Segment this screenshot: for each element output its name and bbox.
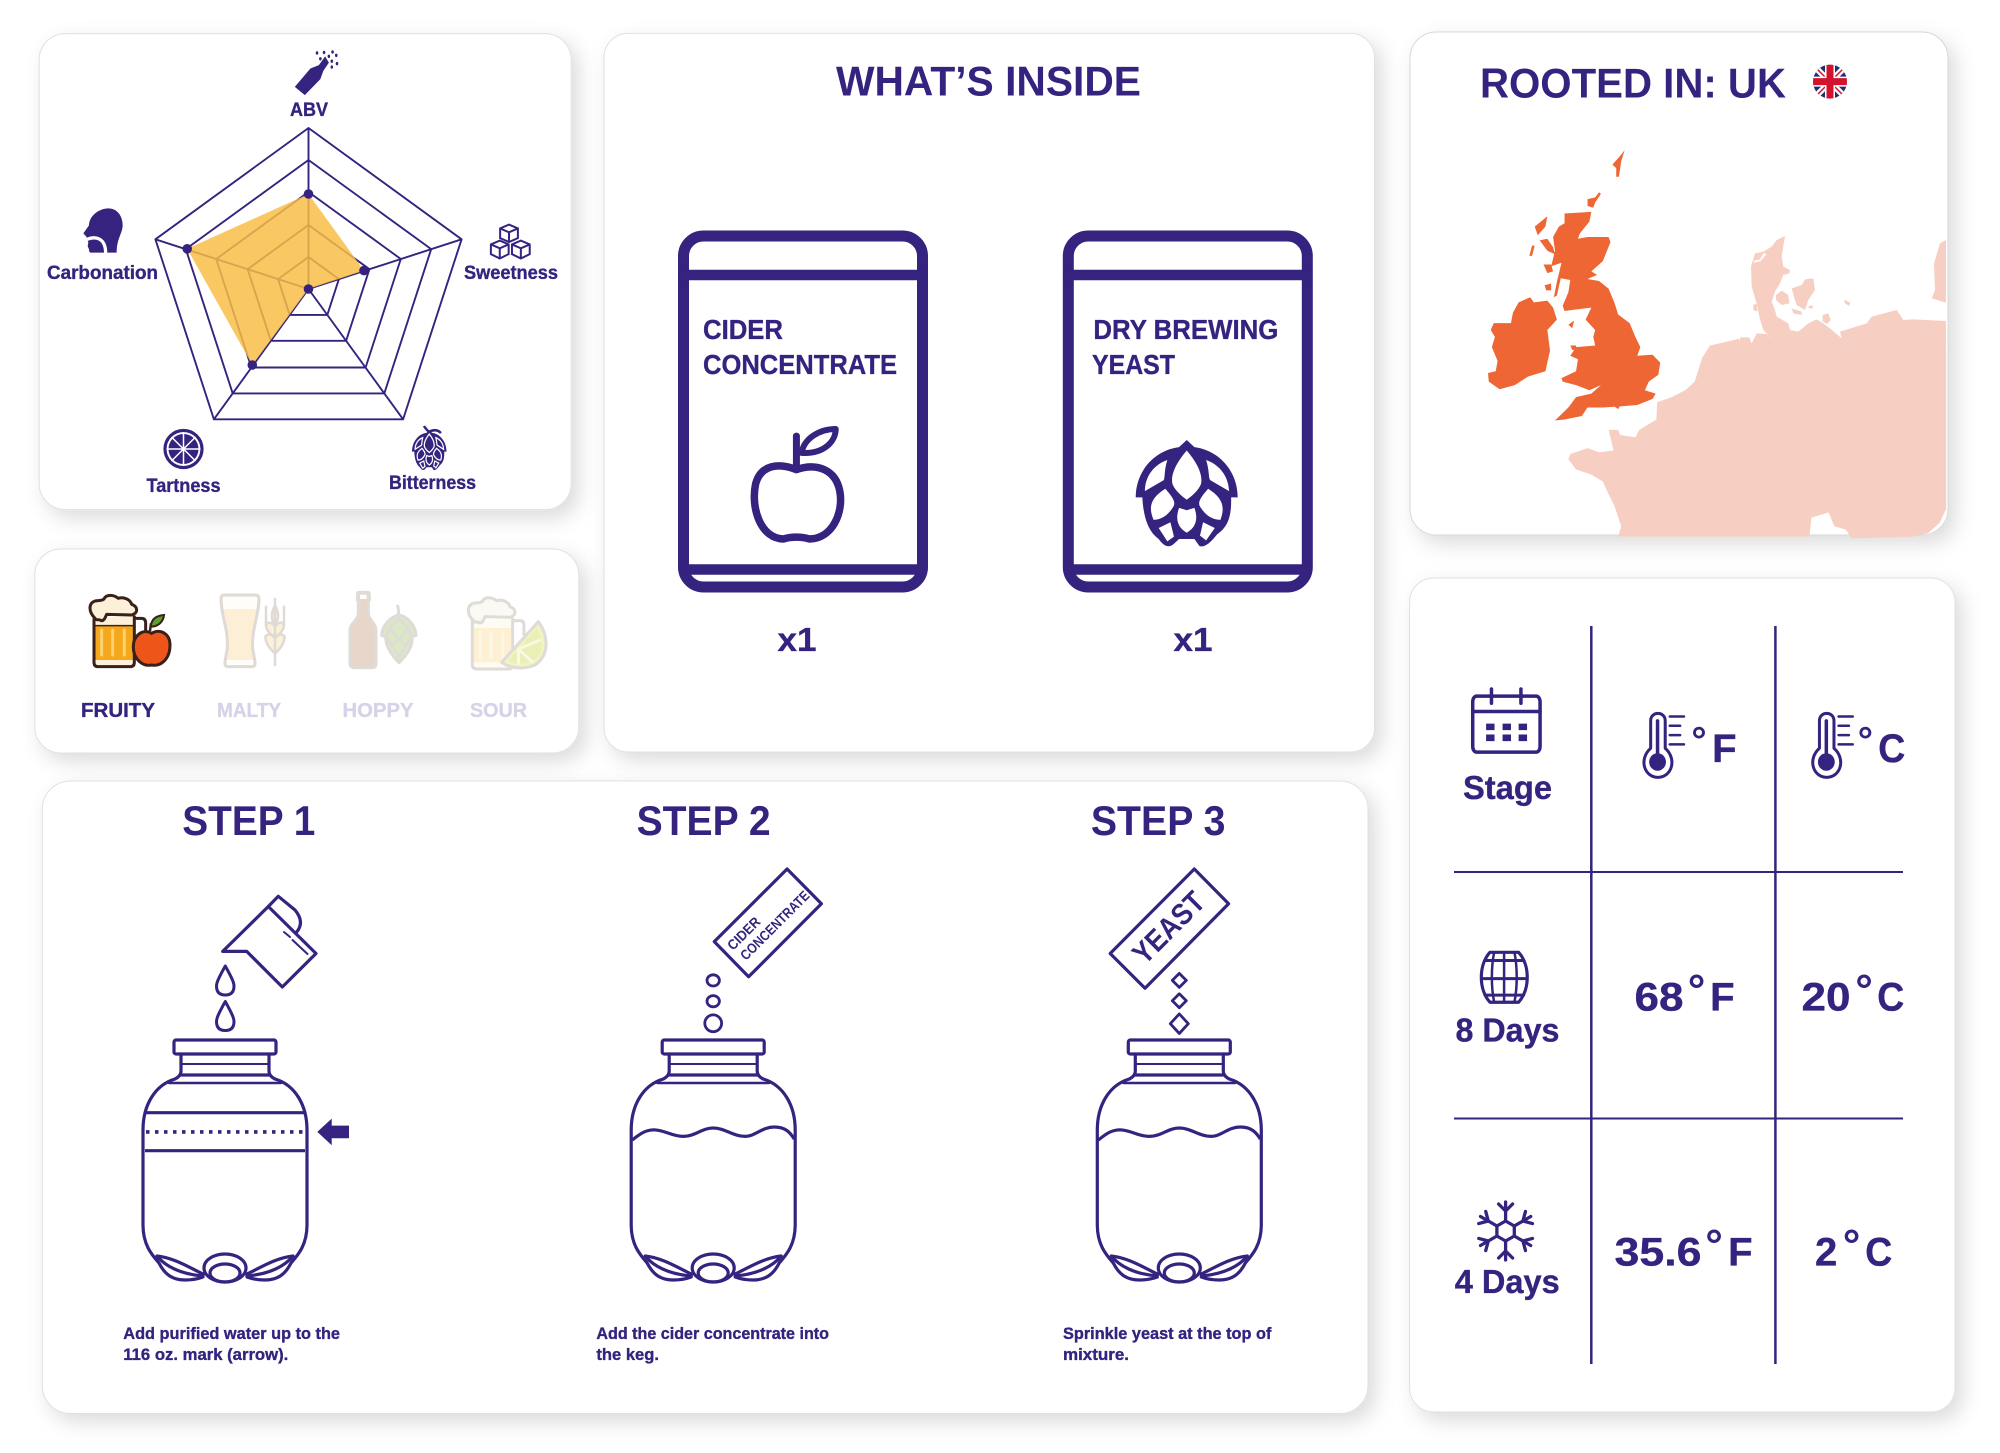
text: step 2 instruction: the keg. <box>596 1346 659 1364</box>
icon: sour mug and lime <box>468 598 546 669</box>
panel: rooted in UK <box>1410 32 1948 538</box>
header: degrees F: ° <box>1691 721 1707 763</box>
label: Bitterness: Bitterness <box>389 473 476 494</box>
icon: head and throat <box>83 208 123 253</box>
label: dry brewing yeast: DRY BREWING <box>1093 314 1278 345</box>
header: degrees C: C <box>1878 727 1905 771</box>
icon: water drops <box>216 966 234 1030</box>
icon: fruity mug and apple <box>90 595 170 667</box>
arrow: fill mark <box>317 1119 349 1145</box>
label: cider concentrate: CIDER <box>703 314 783 345</box>
value: 2 C: ° <box>1843 1221 1860 1270</box>
label: Sweetness: Sweetness <box>464 263 558 284</box>
header: degrees F: F <box>1712 727 1737 771</box>
radar chart <box>155 128 462 419</box>
flavour profile polygon <box>187 194 364 365</box>
text: step 3 instruction: Sprinkle yeast at the top of <box>1063 1325 1272 1343</box>
icon: cider concentrate packet: CIDER <box>724 914 763 953</box>
icon: thermometer F <box>1644 713 1684 777</box>
icon: hop, small <box>412 426 447 470</box>
heading: step 1: STEP 1 <box>182 797 315 844</box>
icon: keg with level mark <box>143 1040 307 1282</box>
pack: cider concentrate <box>684 236 922 587</box>
value: 35.6 F: 35.6 <box>1614 1230 1702 1274</box>
icon: UK flag <box>1812 64 1848 100</box>
panel: flavour radar <box>39 34 571 510</box>
icon: barrel <box>1481 952 1527 1002</box>
icon: measuring jug <box>223 896 316 987</box>
panel: fermentation table <box>1410 578 1955 1412</box>
icon: snowflake <box>1477 1202 1534 1260</box>
value: 68 F: ° <box>1688 966 1705 1015</box>
label: cider concentrate: CONCENTRATE <box>703 349 897 380</box>
icon: keg with mixture <box>1097 1040 1261 1282</box>
icon: malty glass and wheat <box>221 595 285 667</box>
icon: falling yeast <box>1170 973 1188 1034</box>
panel: flavour categories <box>35 549 579 753</box>
value: 35.6 F: ° <box>1705 1221 1723 1270</box>
quantity: yeast: x1 <box>1174 621 1212 658</box>
panel: steps <box>42 781 1368 1414</box>
label: Tartness: Tartness <box>146 476 220 497</box>
step 3 <box>1063 797 1272 1364</box>
heading: what's inside: WHAT’S INSIDE <box>836 58 1141 105</box>
value: 68 F <box>1634 966 1735 1020</box>
data points <box>182 189 369 370</box>
value: 20 C: 20 <box>1802 976 1850 1020</box>
label: ABV: ABV <box>290 100 328 121</box>
text: step 3 instruction <box>1063 1325 1272 1364</box>
text: step 3 instruction: mixture. <box>1063 1346 1129 1364</box>
value: 68 F: 68 <box>1634 976 1684 1020</box>
heading: step 3: STEP 3 <box>1091 797 1225 844</box>
icon: yeast packet: YEAST <box>1126 885 1212 971</box>
icon: yeast packet <box>1110 869 1229 988</box>
value: 2 C <box>1815 1221 1892 1274</box>
icon: citrus slice <box>165 430 202 468</box>
header: degrees F <box>1691 721 1737 771</box>
heading: rooted in UK: ROOTED IN: UK <box>1480 60 1786 106</box>
label: Carbonation: Carbonation <box>47 263 158 284</box>
text: step 1 instruction: Add purified water up to the <box>123 1325 340 1343</box>
value: 35.6 F: F <box>1728 1230 1753 1274</box>
label: 4 Days: 4 Days <box>1455 1263 1560 1300</box>
step 2 <box>596 797 829 1364</box>
text: step 1 instruction: 116 oz. mark (arrow). <box>123 1346 288 1364</box>
label: cider concentrate <box>703 314 897 380</box>
pack: dry brewing yeast <box>1068 236 1307 587</box>
icon: cider concentrate packet: CONCENTRATE <box>737 887 812 963</box>
panel: what's inside <box>604 33 1374 752</box>
step 1 <box>123 797 349 1364</box>
value: 20 C <box>1802 966 1904 1020</box>
label: HOPPY: HOPPY <box>342 700 414 722</box>
icon: calendar <box>1473 689 1540 752</box>
text: step 2 instruction <box>596 1325 829 1364</box>
text: step 2 instruction: Add the cider concentrate into <box>596 1325 829 1343</box>
icon: ice cubes <box>491 225 530 258</box>
label: Stage: Stage <box>1463 769 1552 806</box>
text: step 1 instruction <box>123 1325 340 1364</box>
quantity: cider concentrate: x1 <box>778 621 816 658</box>
map: europe <box>1568 236 1946 538</box>
icon: cider concentrate packet <box>714 869 821 977</box>
icon: hoppy bottle and hop <box>350 592 416 668</box>
label: dry brewing yeast: YEAST <box>1092 349 1175 380</box>
label: FRUITY: FRUITY <box>81 700 156 722</box>
icon: keg with water <box>631 1040 795 1282</box>
label: dry brewing yeast <box>1092 314 1278 380</box>
header: degrees C: ° <box>1858 721 1873 763</box>
value: 20 C: C <box>1877 976 1904 1020</box>
value: 35.6 F <box>1614 1221 1753 1274</box>
label: SOUR: SOUR <box>470 700 528 722</box>
map: UK and Ireland <box>1488 150 1660 421</box>
icon: hop <box>1136 440 1238 546</box>
value: 2 C: C <box>1865 1230 1892 1274</box>
icon: falling granules <box>705 975 722 1032</box>
label: MALTY: MALTY <box>217 700 282 722</box>
icon: ABV bottle <box>295 50 338 95</box>
icon: thermometer C <box>1813 713 1853 777</box>
value: 2 C: 2 <box>1815 1230 1837 1274</box>
icon: apple <box>754 429 841 539</box>
value: 68 F: F <box>1710 976 1735 1020</box>
label: 8 Days: 8 Days <box>1456 1012 1560 1049</box>
header: degrees C <box>1858 721 1905 771</box>
heading: step 2: STEP 2 <box>637 797 771 844</box>
value: 20 C: ° <box>1855 966 1873 1015</box>
